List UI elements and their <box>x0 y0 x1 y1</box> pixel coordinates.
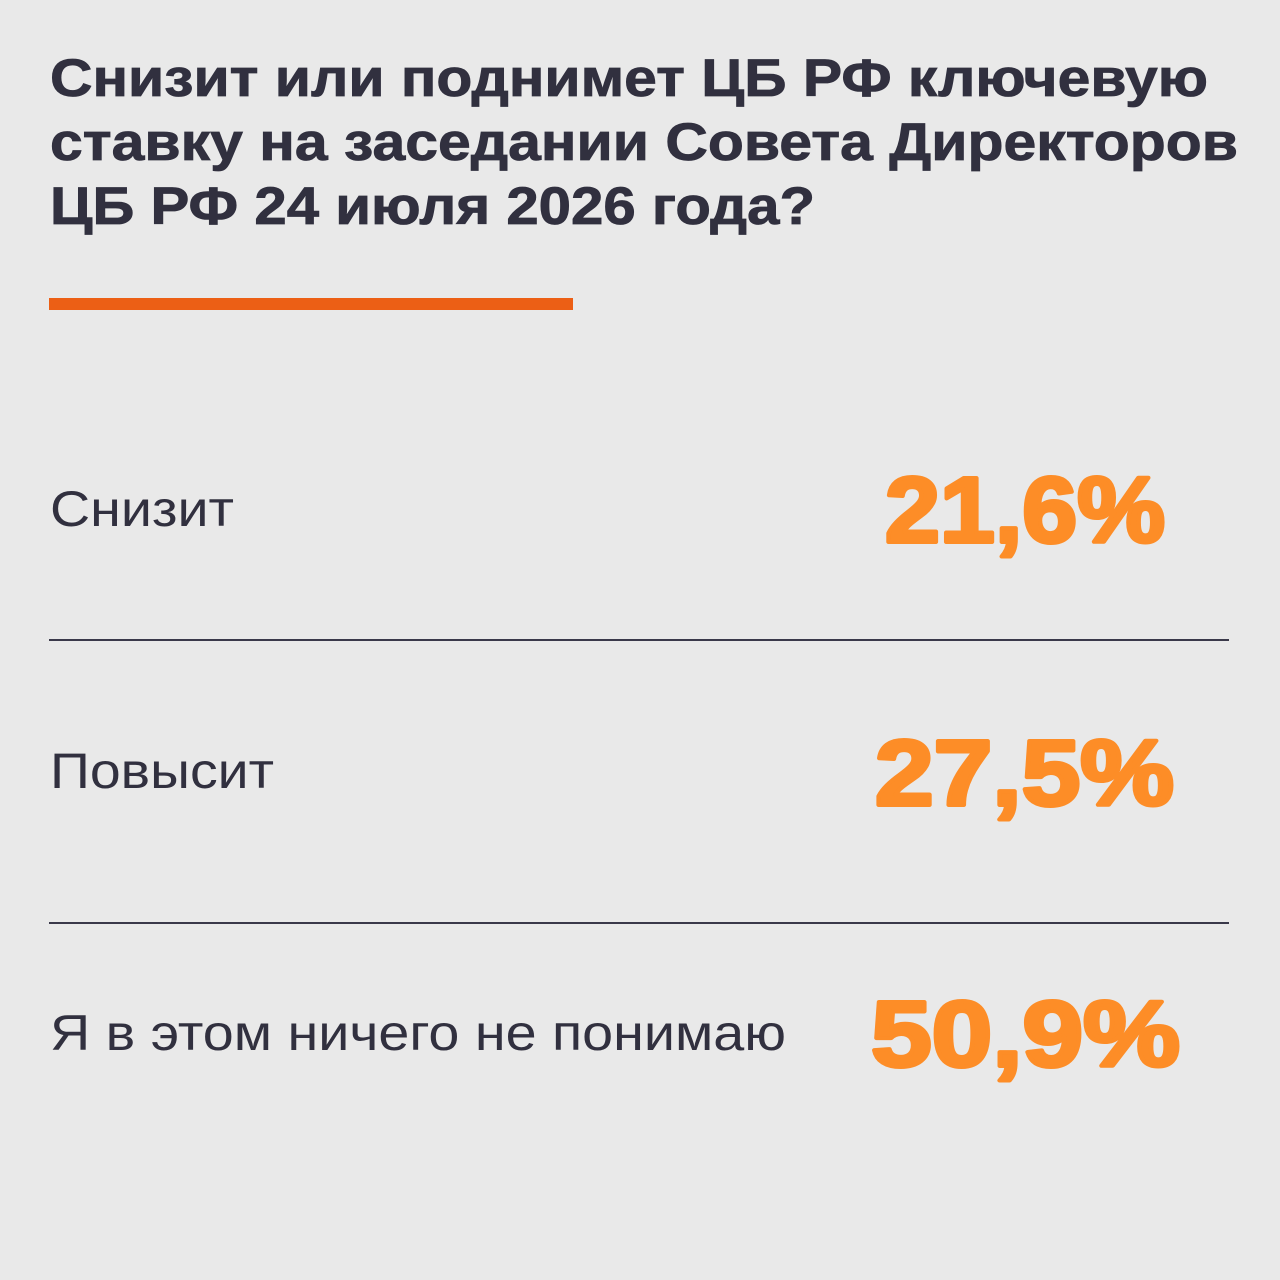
row: Снизит <box>50 458 1165 562</box>
row: Я в этом ничего не понимаю <box>50 982 1180 1086</box>
accent bar <box>49 298 573 310</box>
title: Снизит или поднимет ЦБ РФ ключевую <box>50 49 1208 108</box>
title <box>50 49 1238 236</box>
title: ставку на заседании Совета Директоров <box>50 113 1238 172</box>
label: Снизит: Снизит <box>50 481 234 537</box>
row: Повысит <box>50 721 1174 825</box>
value: 50,9%: 50,9% <box>871 982 1180 1086</box>
label: Повысит: Повысит <box>50 743 274 799</box>
label: Я в этом ничего не понимаю: Я в этом ничего не понимаю <box>50 1005 786 1061</box>
value: 21,6%: 21,6% <box>885 458 1165 562</box>
value: 27,5%: 27,5% <box>875 721 1174 825</box>
title: ЦБ РФ 24 июля 2026 года? <box>50 177 815 236</box>
